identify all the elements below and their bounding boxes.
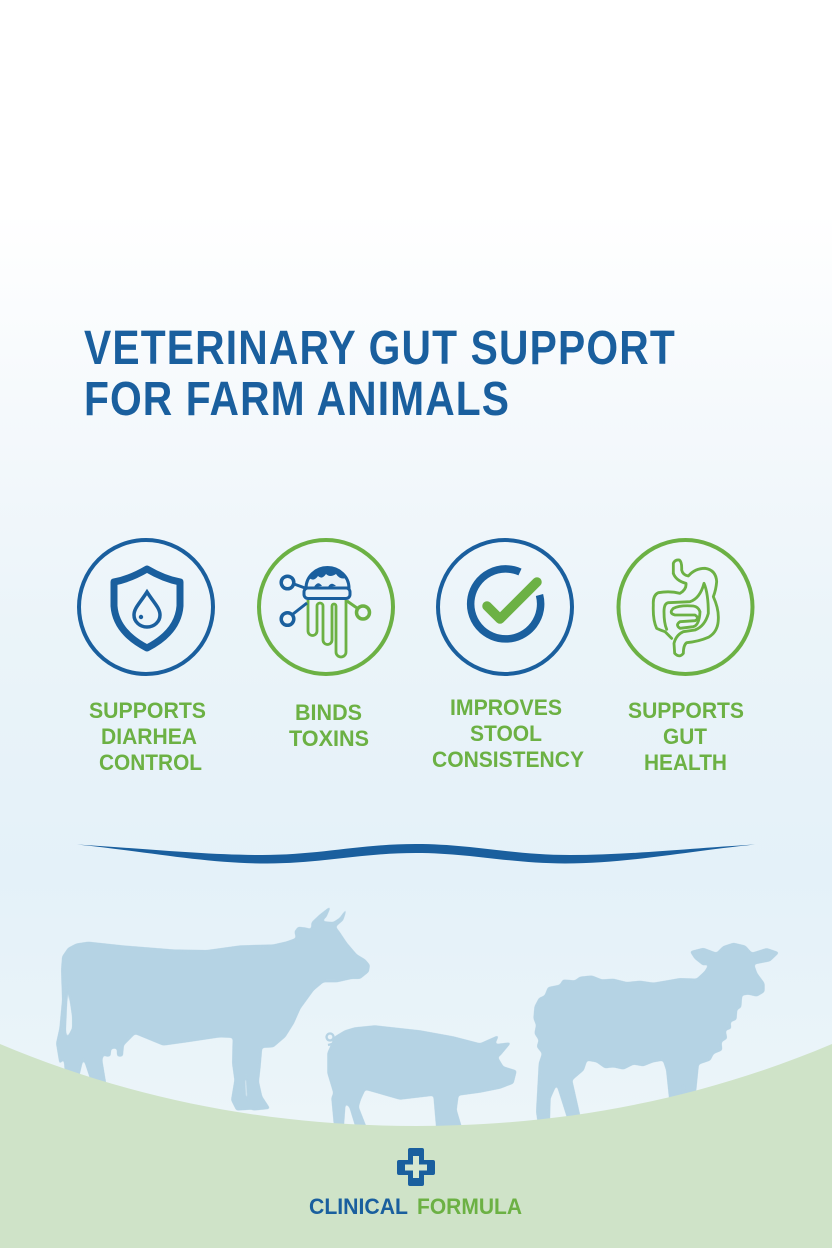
- footer badge: [309, 1148, 522, 1219]
- label: binds toxins: [289, 700, 369, 751]
- icon: intestines: [618, 540, 752, 674]
- animal silhouettes: [57, 907, 778, 1130]
- label: supports gut health: HEALTH: [644, 750, 727, 775]
- icon: check mark in ring: [438, 540, 572, 674]
- icon: shield with water drop: [79, 540, 213, 674]
- text: clinical formula: [309, 1194, 522, 1219]
- label: supports diarhea control: SUPPORTS: [89, 698, 206, 723]
- label: supports diarhea control: [89, 698, 206, 775]
- label: improves stool consistency: [432, 695, 584, 772]
- benefit: supports diarrhea control: [79, 540, 213, 775]
- label: supports diarhea control: DIARHEA: [101, 724, 197, 749]
- icon: toxin-binding molecule: [259, 540, 393, 674]
- label: supports gut health: GUT: [663, 724, 708, 749]
- title: FOR FARM ANIMALS: [84, 373, 509, 426]
- wave divider: [77, 844, 755, 864]
- green hill: [0, 1044, 832, 1248]
- cow silhouette: [57, 907, 369, 1110]
- title: [84, 322, 675, 426]
- benefit: binds toxins: [259, 540, 393, 751]
- pig tail: [327, 1034, 336, 1045]
- text: clinical formula: CLINICAL: [309, 1194, 408, 1219]
- sheep silhouette: [534, 943, 778, 1123]
- text: clinical formula: FORMULA: [417, 1194, 522, 1219]
- label: improves stool consistency: STOOL: [470, 721, 542, 746]
- benefit: improves stool consistency: [432, 540, 584, 772]
- icon: medical cross: [397, 1148, 435, 1186]
- label: improves stool consistency: IMPROVES: [450, 695, 562, 720]
- label: supports gut health: [628, 698, 744, 775]
- title: VETERINARY GUT SUPPORT: [84, 322, 675, 375]
- pig silhouette: [327, 1026, 516, 1130]
- benefit: supports gut health: [618, 540, 752, 775]
- label: binds toxins: TOXINS: [289, 726, 369, 751]
- label: improves stool consistency: CONSISTENCY: [432, 747, 584, 772]
- label: supports diarhea control: CONTROL: [99, 750, 202, 775]
- label: supports gut health: SUPPORTS: [628, 698, 744, 723]
- label: binds toxins: BINDS: [295, 700, 362, 725]
